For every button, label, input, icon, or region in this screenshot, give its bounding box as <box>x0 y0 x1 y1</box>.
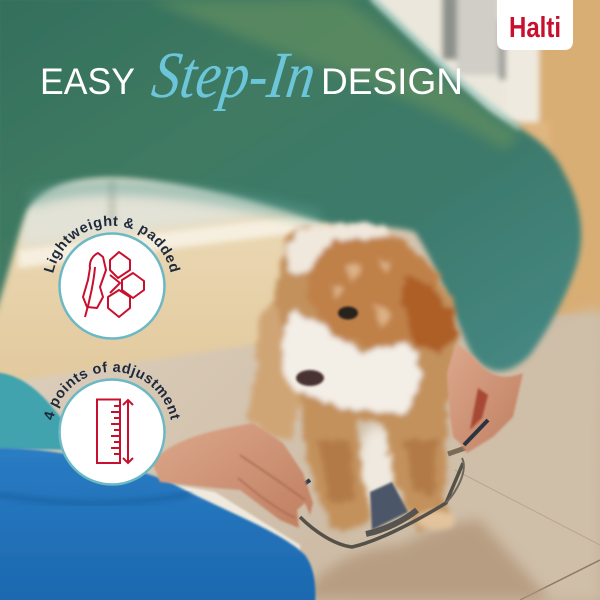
pale floor between the dog legs <box>356 425 400 515</box>
curved label: 4 points of adjustment <box>44 362 180 420</box>
harness <box>286 447 468 547</box>
dog eye <box>338 306 358 320</box>
floor right <box>300 307 600 600</box>
sleeve highlight <box>150 0 520 150</box>
strap held in right hand <box>464 420 488 445</box>
icon: hexagon padding <box>108 252 144 317</box>
hand left <box>152 423 313 528</box>
harness straps <box>300 463 463 547</box>
dog nose <box>296 370 324 386</box>
title <box>40 39 463 112</box>
palm shadow <box>470 388 488 430</box>
wall behind the dog <box>0 170 330 385</box>
finger creases <box>238 455 305 518</box>
teal sweater sleeve left <box>0 372 85 450</box>
dog torso and front legs <box>275 225 457 532</box>
harness pad <box>370 482 408 530</box>
icon: feather <box>83 253 106 317</box>
sleeve rim light <box>372 0 520 128</box>
dog paw highlight <box>415 510 455 530</box>
badge: 4 points of adjustment <box>44 362 180 486</box>
dog ear <box>403 275 457 353</box>
script accent: Step-In <box>148 39 320 112</box>
dog hind leg <box>247 300 300 440</box>
icon: double arrow <box>123 400 133 463</box>
pale gap under the hand <box>150 480 300 560</box>
right wooden wall and window frame <box>370 0 600 322</box>
bright window <box>15 175 300 250</box>
title: DESIGN <box>321 61 463 102</box>
green sleeve <box>0 0 581 371</box>
hand right <box>447 343 523 453</box>
dog white chest <box>281 308 421 415</box>
sleeve lower light edge <box>30 187 320 218</box>
dog curls <box>330 258 392 328</box>
badge circle <box>60 380 164 484</box>
harness padded edge <box>366 510 417 534</box>
logo wordmark: Halti <box>509 12 561 44</box>
curved label: Lightweight & padded <box>44 216 181 273</box>
floor shadow under the dog <box>300 520 550 600</box>
badge: lightweight & padded <box>44 216 181 340</box>
dog white top of head <box>285 224 392 275</box>
dog <box>247 224 457 532</box>
icon: ruler <box>97 400 120 463</box>
title: EASY <box>40 61 135 102</box>
badge circle <box>60 234 164 338</box>
dog head fur <box>307 238 440 350</box>
blue jeans <box>0 448 315 600</box>
dog leg darker fur <box>318 440 438 505</box>
logo tab <box>497 0 573 50</box>
